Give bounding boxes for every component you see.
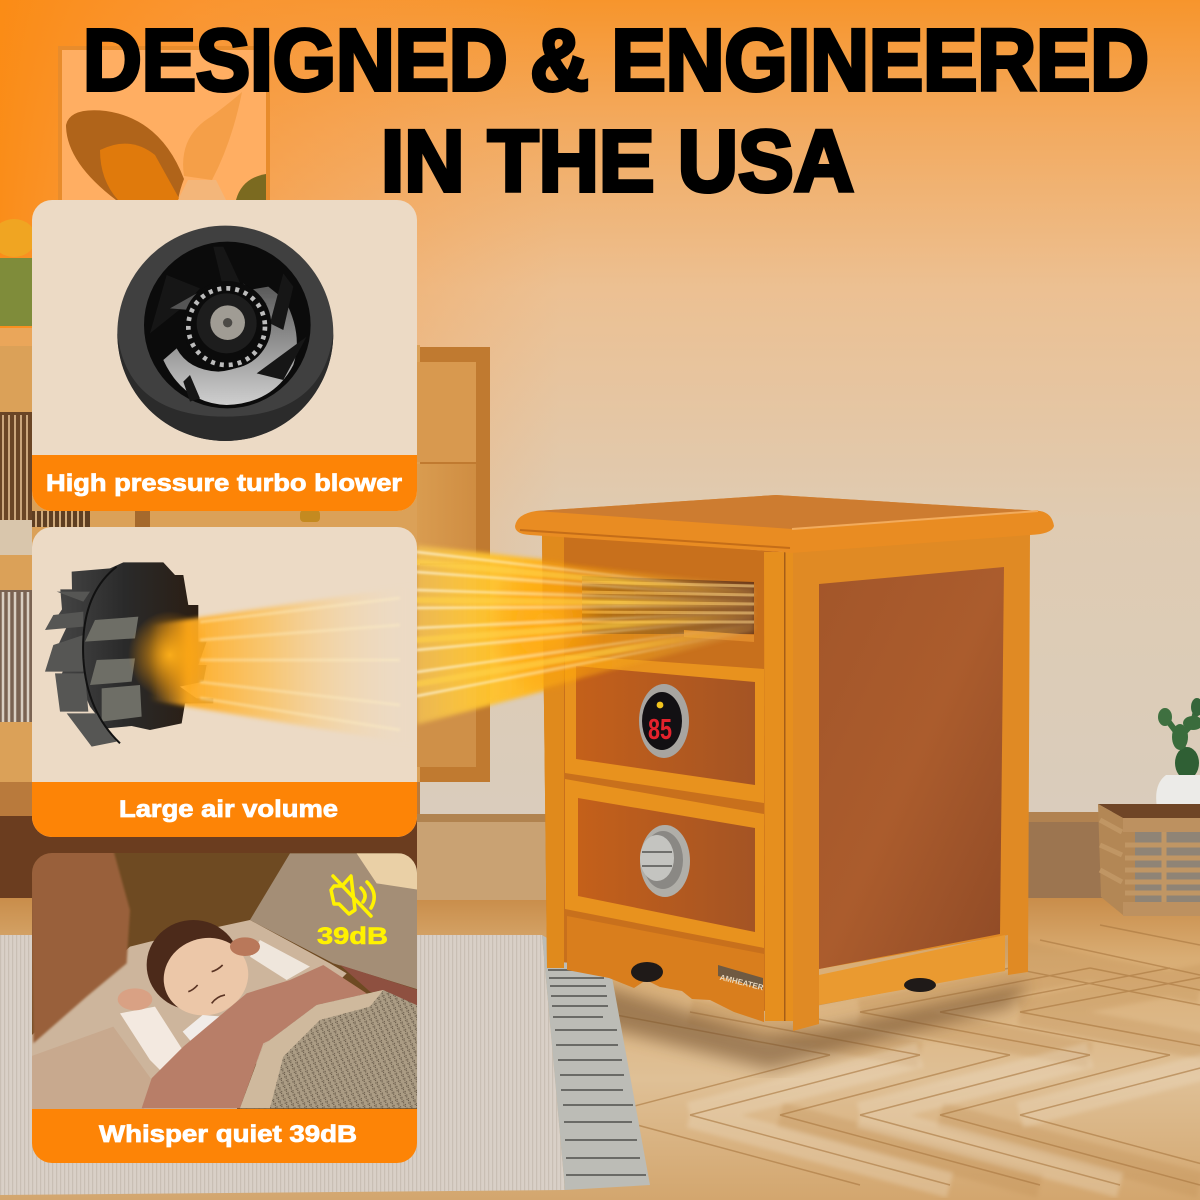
metal crescent	[163, 287, 297, 405]
side panel	[819, 567, 1004, 969]
scalloped apron	[567, 916, 764, 1022]
rug fringe	[542, 935, 650, 1190]
dark blades	[150, 247, 307, 402]
potted cactus	[1156, 698, 1200, 820]
floor herringbone boards	[600, 925, 1200, 1185]
39dB badge: 39dB	[317, 923, 388, 950]
wall painting	[60, 48, 268, 208]
heater front face	[542, 534, 784, 1016]
left arm	[120, 1007, 182, 1075]
face	[164, 938, 248, 1016]
icon: blower wheel	[45, 562, 213, 747]
label: High pressure turbo blower	[46, 470, 402, 497]
panel: high pressure turbo blower	[32, 200, 417, 511]
bed sheet	[30, 920, 347, 1110]
wooden cabinet on left	[0, 345, 490, 900]
label: Large air volume	[119, 796, 338, 823]
grey pillow	[250, 853, 420, 990]
room background wall	[0, 0, 1200, 900]
floor	[0, 898, 1200, 1200]
collar	[182, 1015, 220, 1040]
sleeping child photo	[30, 850, 420, 1110]
side bottom rail	[819, 935, 1005, 1005]
title: DESIGNED & ENGINEERED	[83, 12, 1149, 109]
heat airflow to heater	[417, 545, 754, 725]
right arm	[250, 940, 310, 980]
hair	[147, 920, 240, 1010]
panel: large air volume	[32, 527, 417, 837]
rug	[0, 935, 650, 1195]
digital display: 85	[648, 714, 672, 746]
wheel core glow	[128, 611, 212, 699]
skirting board	[417, 812, 1200, 900]
outlet shelf	[684, 630, 754, 642]
heater left post	[542, 534, 564, 968]
digital display	[639, 684, 689, 758]
airflow beam	[150, 585, 417, 745]
air streaks	[200, 598, 400, 730]
outlet grille	[582, 582, 754, 622]
heat glow on heater front	[417, 548, 754, 722]
fur pillow	[30, 850, 130, 1043]
brand badge: AMHEATER	[719, 973, 765, 992]
control knob	[640, 825, 690, 897]
heat streaks	[417, 552, 754, 696]
heater corner post	[764, 552, 793, 1021]
lower drawer	[565, 779, 764, 948]
casters	[631, 962, 936, 992]
icon: turbo blower	[117, 226, 333, 441]
knit blanket	[240, 990, 420, 1108]
heater shadow on floor	[590, 982, 1030, 1069]
pink blanket	[142, 965, 367, 1108]
air outlet	[582, 576, 754, 634]
heater side frame	[793, 534, 1030, 1031]
wicker basket	[1098, 804, 1200, 916]
heater top	[515, 495, 1054, 553]
brand badge	[718, 965, 765, 992]
plant on cabinet	[0, 219, 36, 346]
icon: muted speaker	[331, 876, 374, 916]
panel: whisper quiet	[30, 850, 420, 1163]
title	[83, 12, 1149, 210]
upper drawer	[565, 655, 764, 803]
wooden heater	[515, 495, 1054, 1031]
label: Whisper quiet 39dB	[99, 1121, 357, 1148]
title: IN THE USA	[381, 113, 854, 210]
